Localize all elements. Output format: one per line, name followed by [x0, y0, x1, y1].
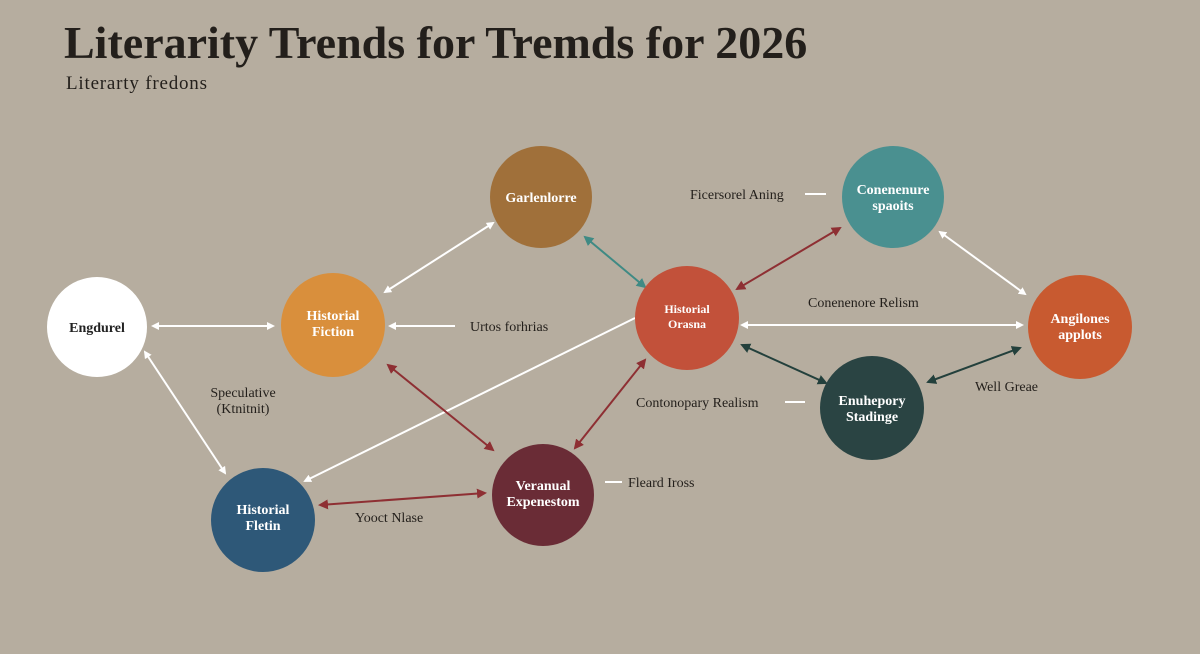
node: Enuhepory Stadinge — [820, 356, 924, 460]
labels: Yooct Nlase — [355, 511, 423, 526]
node: Veranual Expenestom: Expenestom — [506, 495, 580, 510]
node: Angilones applots — [1028, 275, 1132, 379]
node: Historial Orasna: Historial — [664, 302, 710, 316]
node: Historial Orasna: Orasna — [668, 317, 706, 331]
node: Historial Fiction: Historial — [307, 309, 360, 324]
labels: (Ktnitnit) — [217, 402, 270, 417]
title: Literarity Trends for Tremds for 2026 — [64, 17, 807, 68]
node: Historial Fletin — [211, 468, 315, 572]
node: Enuhepory Stadinge: Stadinge — [846, 410, 898, 425]
node: Historial Orasna — [635, 266, 739, 370]
labels: Well Greae — [975, 380, 1038, 395]
labels — [210, 188, 1038, 526]
node: Historial Fletin: Fletin — [246, 519, 281, 534]
node: Engdurel — [47, 277, 147, 377]
node: Garlenlorre — [490, 146, 592, 248]
subtitle: Literarty fredons — [66, 73, 208, 94]
labels: Speculative — [210, 386, 276, 401]
node: Conenenure spaoits — [842, 146, 944, 248]
node: Garlenlorre: Garlenlorre — [505, 191, 577, 206]
node: Conenenure spaoits: Conenenure — [857, 183, 929, 198]
node: Historial Fiction — [281, 273, 385, 377]
node: Veranual Expenestom — [492, 444, 594, 546]
labels: Contonopary Realism — [636, 396, 759, 411]
node: Engdurel: Engdurel — [69, 321, 125, 336]
labels: Ficersorel Aning — [690, 188, 784, 203]
node: Historial Fletin: Historial — [237, 503, 290, 518]
node: Veranual Expenestom: Veranual — [516, 479, 570, 494]
arrows — [145, 194, 1025, 505]
labels: Conenenore Relism — [808, 296, 919, 311]
node: Angilones applots: applots — [1058, 328, 1102, 343]
labels: Fleard Iross — [628, 476, 694, 491]
labels: Urtos forhrias — [470, 320, 548, 335]
node: Historial Fiction: Fiction — [312, 325, 354, 340]
node: Angilones applots: Angilones — [1050, 312, 1110, 327]
nodes — [47, 146, 1132, 572]
node: Conenenure spaoits: spaoits — [872, 199, 914, 214]
node: Enuhepory Stadinge: Enuhepory — [839, 394, 905, 409]
